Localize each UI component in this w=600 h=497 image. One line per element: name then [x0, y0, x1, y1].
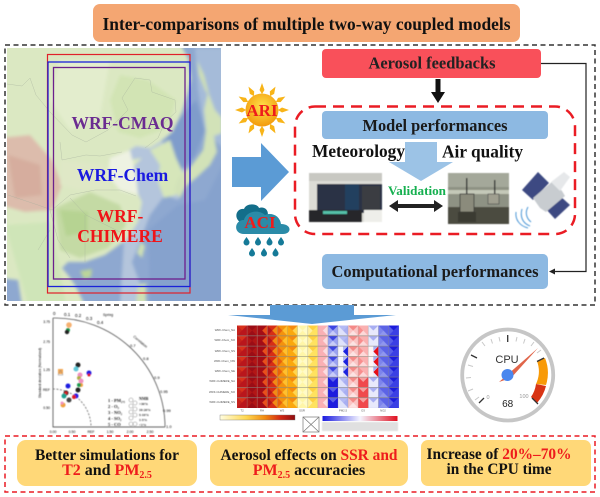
callout: aerosol effects: 2.5	[278, 470, 290, 481]
chart: Taylor diagram: 2.00	[127, 430, 133, 434]
callout: CPU time increase	[421, 440, 591, 486]
callout: CPU time increase: Increase of 20%–70%	[426, 446, 572, 463]
chart: Taylor diagram: 1.0	[166, 424, 172, 429]
chart: Taylor diagram: 4 - SO₂	[108, 416, 122, 421]
chart: triangle heatmap: WS	[280, 408, 284, 412]
icon: ARI sun	[235, 83, 289, 137]
box: model performances	[322, 111, 548, 139]
icon: CPU gauge: 100	[519, 394, 529, 400]
callout: aerosol effects: accuracies	[290, 462, 365, 479]
chart: Taylor diagram: Spring	[103, 313, 113, 317]
chart: Taylor diagram: <1%	[139, 423, 147, 427]
chart: triangle heatmap: WRF-Chem_NO	[214, 338, 236, 342]
arrow: feedbacks to model performances	[431, 79, 445, 103]
callout: CPU time increase: in the CPU time	[446, 461, 552, 478]
chart: Taylor diagram: REF	[43, 388, 50, 392]
callout: better simulations: T2 and PM	[62, 462, 139, 479]
chart: Taylor diagram: 5-10%	[139, 413, 149, 417]
chart: Taylor diagram	[38, 311, 172, 434]
chart: Taylor diagram: Standard deviation (Normalized)	[38, 348, 42, 398]
legend: triangle key	[303, 417, 319, 432]
chart: triangle heatmap: NO2	[380, 408, 386, 412]
map of model domains	[0, 40, 225, 305]
chart: Taylor diagram: 10-20%	[139, 408, 151, 412]
photo: supercomputer	[309, 173, 382, 222]
label: validation: Validation	[388, 184, 446, 198]
chart: triangle heatmap: WRF-Chem_NS	[215, 349, 235, 353]
chart: Taylor diagram: >30%	[139, 402, 148, 406]
legend: sequential colour bar	[220, 415, 295, 420]
callout: aerosol effects: PM	[253, 462, 290, 481]
chart: Taylor diagram: 1-5%	[139, 418, 148, 422]
chart: Taylor diagram: 0.1	[64, 312, 71, 317]
label: WRF-CMAQ: WRF-CMAQ	[71, 113, 174, 133]
chart: Taylor diagram: 0.95	[160, 389, 169, 394]
icon: CPU gauge	[462, 330, 553, 420]
chart: Taylor diagram: 3.75	[43, 320, 50, 324]
chart: Taylor diagram: 0.99	[163, 408, 172, 413]
icon: CPU gauge: 0	[486, 395, 490, 401]
chart: Taylor diagram: 0	[53, 311, 56, 316]
arrow: big blue right arrow	[232, 143, 289, 201]
arrow: double-headed validation arrow	[389, 200, 443, 212]
label: WRF-Chem: WRF-Chem	[77, 165, 169, 185]
callout: better simulations: 2.5	[139, 470, 152, 481]
photo: monitoring station	[448, 173, 509, 224]
chart: Taylor diagram: 5 - CO	[108, 422, 121, 427]
chart: triangle heatmap: WRF-Chem_NE	[215, 369, 235, 373]
icon: ACI cloud with rain: ACI	[244, 213, 276, 232]
chart: triangle heatmap	[209, 326, 399, 432]
icon: ARI sun: ARI	[246, 101, 278, 120]
gauge: orange band	[536, 358, 548, 385]
chart: Taylor diagram: 2.75	[43, 340, 50, 344]
gauge: red band	[531, 384, 546, 403]
chart: Taylor diagram: 0.00	[50, 430, 56, 434]
chart: Taylor diagram: 0.50	[69, 430, 75, 434]
panel: model framework dashed frame	[5, 45, 595, 305]
chart: Taylor diagram: REF	[88, 430, 94, 434]
chart: Taylor diagram: 0.50	[43, 406, 50, 410]
icon: satellite	[516, 172, 570, 228]
heading: meteorology: Meteorology	[312, 141, 405, 161]
legend: tick values	[322, 422, 398, 431]
chart: Taylor diagram: 0.2	[75, 313, 82, 318]
chart: triangle heatmap: PM2.5	[339, 408, 347, 412]
panel: conclusions red dashed frame	[5, 436, 595, 492]
callout: aerosol effects: Aerosol effects on SSR and	[220, 447, 398, 464]
arrow: feedbacks to computational performances	[541, 64, 586, 272]
chart: triangle heatmap: T2	[240, 408, 244, 412]
chart: Taylor diagram: 3 - NO₂	[108, 410, 123, 415]
box: computational performances	[322, 254, 548, 289]
chart: Taylor diagram: 0.7	[130, 343, 136, 348]
chart: triangle heatmap: WRF-Chem_NA	[215, 328, 235, 332]
label: WRF-CHIMERE: WRF-	[97, 206, 143, 226]
callout: aerosol effects	[210, 440, 408, 486]
chart: Taylor diagram: 1.25	[43, 368, 50, 372]
chart: triangle heatmap: SSR	[299, 408, 305, 412]
arrow: light blue down arrow	[389, 142, 453, 181]
chart: Taylor diagram: 1.50	[107, 430, 113, 434]
icon: CPU gauge: CPU	[495, 354, 519, 366]
chart: triangle heatmap: WRF-CHIMERE_NS	[209, 400, 235, 404]
chart: Taylor diagram: 1 - PM₂.₅	[108, 398, 125, 403]
chart: triangle heatmap: WRF-CHIMERE_NO	[209, 390, 236, 394]
domain box: WRF-Chem blue	[48, 62, 190, 286]
chart: triangle heatmap: WRF-Chem_NW	[214, 359, 235, 363]
chart: Taylor diagram: NMB	[139, 396, 149, 401]
title	[93, 4, 520, 42]
domain box: WRF-CHIMERE red	[48, 54, 190, 293]
box: aerosol feedbacks: Aerosol feedbacks	[368, 54, 496, 72]
chart: Taylor diagram: 2 - O₃	[108, 404, 119, 409]
icon: ACI cloud with rain	[236, 204, 290, 256]
chart: Taylor diagram: 0.9	[154, 375, 160, 380]
arrow: big blue down arrow	[228, 305, 396, 324]
icon: CPU gauge: 68	[502, 399, 514, 410]
box: model performances: Model performances	[362, 116, 508, 135]
panel: model performance red dashed frame	[295, 106, 575, 234]
chart: triangle heatmap: WRF-CHIMERE_NA	[209, 379, 235, 383]
chart: Taylor diagram: 0.4	[97, 320, 104, 325]
callout: better simulations	[17, 440, 197, 486]
domain box: WRF-CMAQ purple	[54, 68, 185, 279]
chart: Taylor diagram: Correlation	[132, 335, 148, 349]
callout: better simulations: Better simulations for	[35, 447, 179, 464]
title: Inter-comparisons of multiple two-way coupled models	[102, 14, 510, 34]
chart: triangle heatmap: RH	[260, 408, 264, 412]
box: aerosol feedbacks	[322, 49, 541, 78]
chart: Taylor diagram: 0.8	[143, 356, 149, 361]
legend: diverging colour bar	[322, 416, 398, 421]
chart: triangle heatmap: O3	[361, 408, 365, 412]
chart: Taylor diagram: 2.50	[147, 430, 153, 434]
label: WRF-CHIMERE: CHIMERE	[77, 226, 163, 246]
box: computational performances: Computational performances	[332, 262, 539, 281]
heading: air quality: Air quality	[442, 142, 523, 162]
chart: Taylor diagram: 0.3	[86, 316, 93, 321]
